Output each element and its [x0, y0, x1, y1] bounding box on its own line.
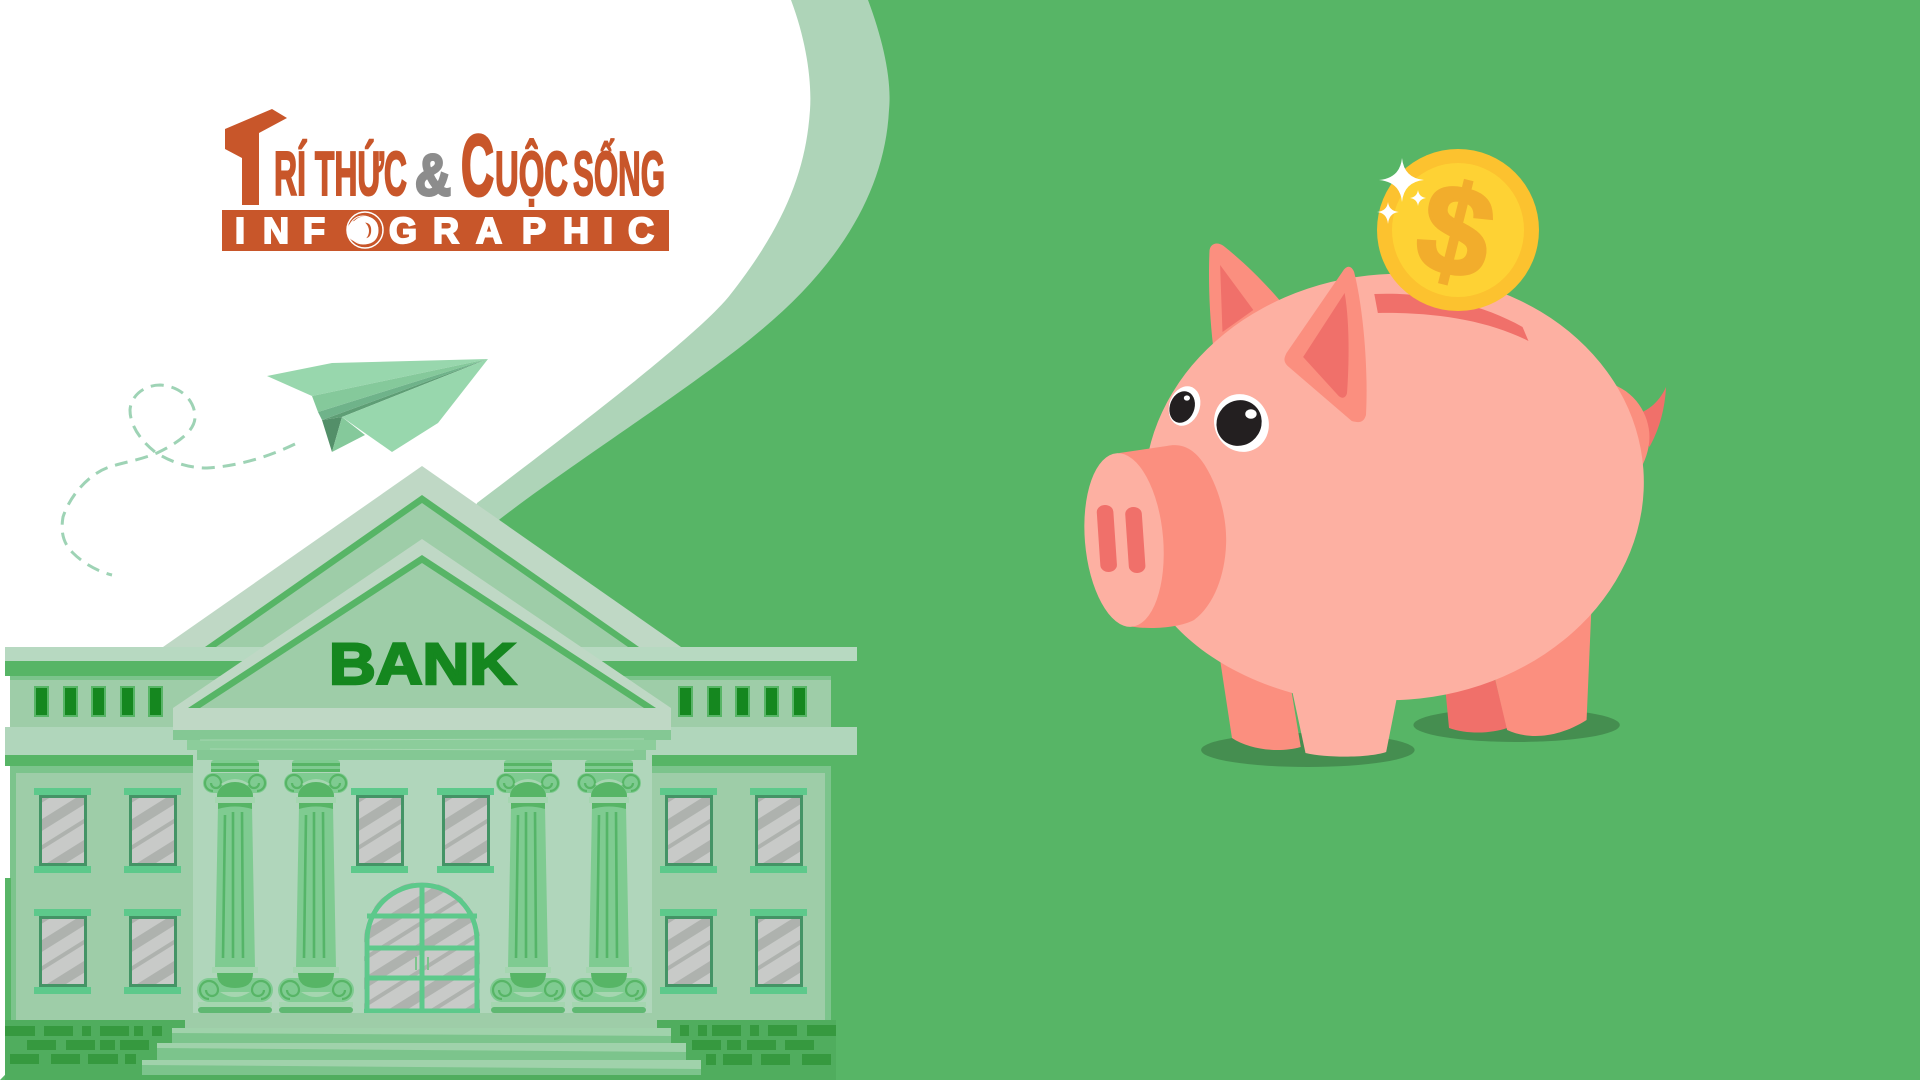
pig back far leg [1445, 680, 1507, 733]
pig ground shadows, legs, tail and far ear [1201, 244, 1666, 767]
dashed flight path [62, 385, 295, 575]
pig coin slot [1374, 294, 1528, 341]
bricks right [680, 1025, 836, 1065]
pig tail [1635, 387, 1666, 447]
logo infographic bar: INFOGRAPHIC [235, 210, 654, 251]
logo wordmark: SỐNG [573, 140, 665, 209]
bank sign: BANK [329, 632, 516, 697]
steps and brick base [5, 1013, 836, 1080]
bank left wing cornice [5, 660, 310, 728]
bank roof inner [205, 495, 639, 647]
logo: Tri Thuc & Cuoc Song Infographic [222, 109, 669, 251]
pig ground shadows [1201, 708, 1620, 767]
bank right wing cornice [540, 660, 857, 728]
pig front leg, slot, ear, eyes and snout [1078, 267, 1528, 757]
piggy bank [1078, 149, 1666, 767]
bank main wall [5, 727, 857, 1028]
attic windows right [678, 686, 807, 717]
pig front leg [1288, 670, 1400, 757]
pig rump [1582, 383, 1649, 472]
logo T mark [225, 109, 287, 205]
arched door [364, 882, 480, 1012]
paper plane [267, 359, 488, 452]
white curved panel [0, 0, 810, 1080]
logo wordmark [274, 118, 665, 214]
pig back ear [1209, 244, 1279, 345]
pale green curved band [0, 0, 890, 600]
pig front ear [1284, 267, 1367, 422]
attic windows left [34, 686, 163, 717]
entablature [173, 708, 671, 760]
gold coin: $ [1404, 153, 1507, 309]
logo wordmark: C [461, 118, 494, 214]
pig snout [1078, 445, 1226, 629]
pig back near leg [1495, 610, 1591, 736]
logo wordmark: & [415, 143, 451, 208]
bank pediment [173, 539, 671, 708]
bank outer roof [163, 466, 681, 647]
pig front far leg [1220, 660, 1301, 750]
upper cornice bands [5, 647, 857, 661]
pig body [1130, 257, 1658, 717]
logo wordmark: UỘC [495, 140, 568, 209]
windows [34, 788, 807, 994]
pig eyes [1165, 384, 1273, 455]
gold coin [1377, 149, 1539, 311]
sparkles [1377, 158, 1426, 224]
logo wordmark: RÍ THỨC [274, 140, 407, 209]
bricks left [5, 1026, 162, 1064]
bank building [5, 466, 857, 1080]
columns [197, 760, 647, 1013]
